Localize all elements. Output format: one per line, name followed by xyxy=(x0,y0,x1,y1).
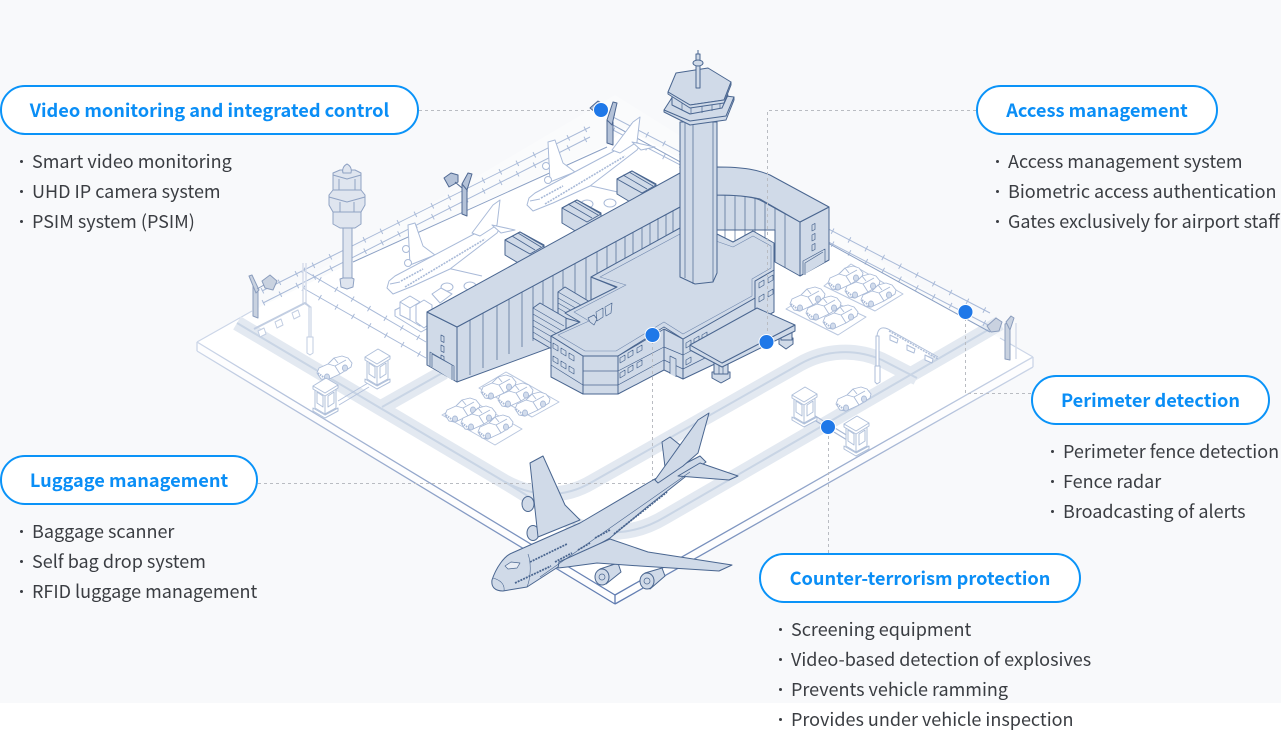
gate: left booths and car xyxy=(313,349,390,418)
terminal: main building walls xyxy=(551,270,774,394)
list: access management: Biometric access authentication xyxy=(1008,178,1276,204)
callout: perimeter detection heading: Perimeter detection xyxy=(1061,387,1240,413)
platform base xyxy=(197,95,1033,604)
list: perimeter detection: Broadcasting of alerts xyxy=(1063,498,1246,524)
callout: luggage management heading: Luggage management xyxy=(30,467,228,493)
main airplane xyxy=(492,413,738,591)
canopy xyxy=(690,308,795,383)
terminal: long wing xyxy=(427,173,680,382)
camera: right corner xyxy=(987,316,1016,360)
list: video monitoring: PSIM system (PSIM) xyxy=(32,208,195,234)
camera: rear left xyxy=(444,173,472,216)
callout: access management heading xyxy=(976,85,1218,135)
roads xyxy=(237,323,1000,532)
callout: counter-terrorism heading xyxy=(759,553,1081,603)
list: counter-terrorism: Screening equipment xyxy=(791,616,971,642)
callout: luggage management heading xyxy=(0,455,258,505)
parking lot: rear-left xyxy=(479,372,559,417)
list: perimeter detection: Perimeter fence detection xyxy=(1063,438,1279,464)
leader lines xyxy=(258,110,1031,553)
callout: video monitoring heading: Video monitoring and integrated control xyxy=(30,97,389,123)
parking lot: front-left xyxy=(442,398,522,445)
list: counter-terrorism: Video-based detection of explosives xyxy=(791,646,1091,672)
small control tower xyxy=(329,164,365,289)
list: counter-terrorism xyxy=(779,616,1091,732)
camera: left corner xyxy=(249,275,277,318)
list: luggage management: RFID luggage management xyxy=(32,578,257,604)
list: access management xyxy=(996,148,1280,234)
marker dots xyxy=(594,102,973,434)
terminal: stairs xyxy=(533,287,590,352)
list: luggage management: Self bag drop system xyxy=(32,548,206,574)
fence: inner left xyxy=(303,263,426,358)
plane: parked rear xyxy=(527,117,655,222)
jetways xyxy=(505,171,656,264)
list: video monitoring: UHD IP camera system xyxy=(32,178,221,204)
gate: right booths and car xyxy=(792,387,871,456)
list: perimeter detection xyxy=(1051,438,1279,524)
fence: back-right xyxy=(613,117,990,332)
plane: parked left xyxy=(387,200,515,305)
callout: counter-terrorism heading: Counter-terrorism protection xyxy=(790,565,1050,591)
camera: rear top xyxy=(590,101,617,145)
cargo pallets xyxy=(395,288,452,332)
callout: perimeter detection heading xyxy=(1031,375,1270,425)
light post: left xyxy=(254,303,313,355)
fence: back-left xyxy=(262,127,607,303)
list: luggage management xyxy=(20,518,257,604)
terminal: curved wing xyxy=(717,167,829,276)
list: access management: Access management system xyxy=(1008,148,1242,174)
control tower xyxy=(664,50,734,284)
parking lot: right-rear xyxy=(824,264,903,311)
list: counter-terrorism: Provides under vehicle inspection xyxy=(791,706,1074,732)
terminal: main roof xyxy=(551,228,774,356)
callout: video monitoring heading xyxy=(0,85,419,135)
light post: right xyxy=(875,328,938,384)
list: perimeter detection: Fence radar xyxy=(1063,468,1161,494)
list: video monitoring: Smart video monitoring xyxy=(32,148,232,174)
callout: access management heading: Access management xyxy=(1006,97,1188,123)
list: video monitoring xyxy=(20,148,232,234)
parking lot: right-front xyxy=(786,287,866,335)
list: luggage management: Baggage scanner xyxy=(32,518,174,544)
list: counter-terrorism: Prevents vehicle ramming xyxy=(791,676,1008,702)
list: access management: Gates exclusively for airport staff xyxy=(1008,208,1280,234)
